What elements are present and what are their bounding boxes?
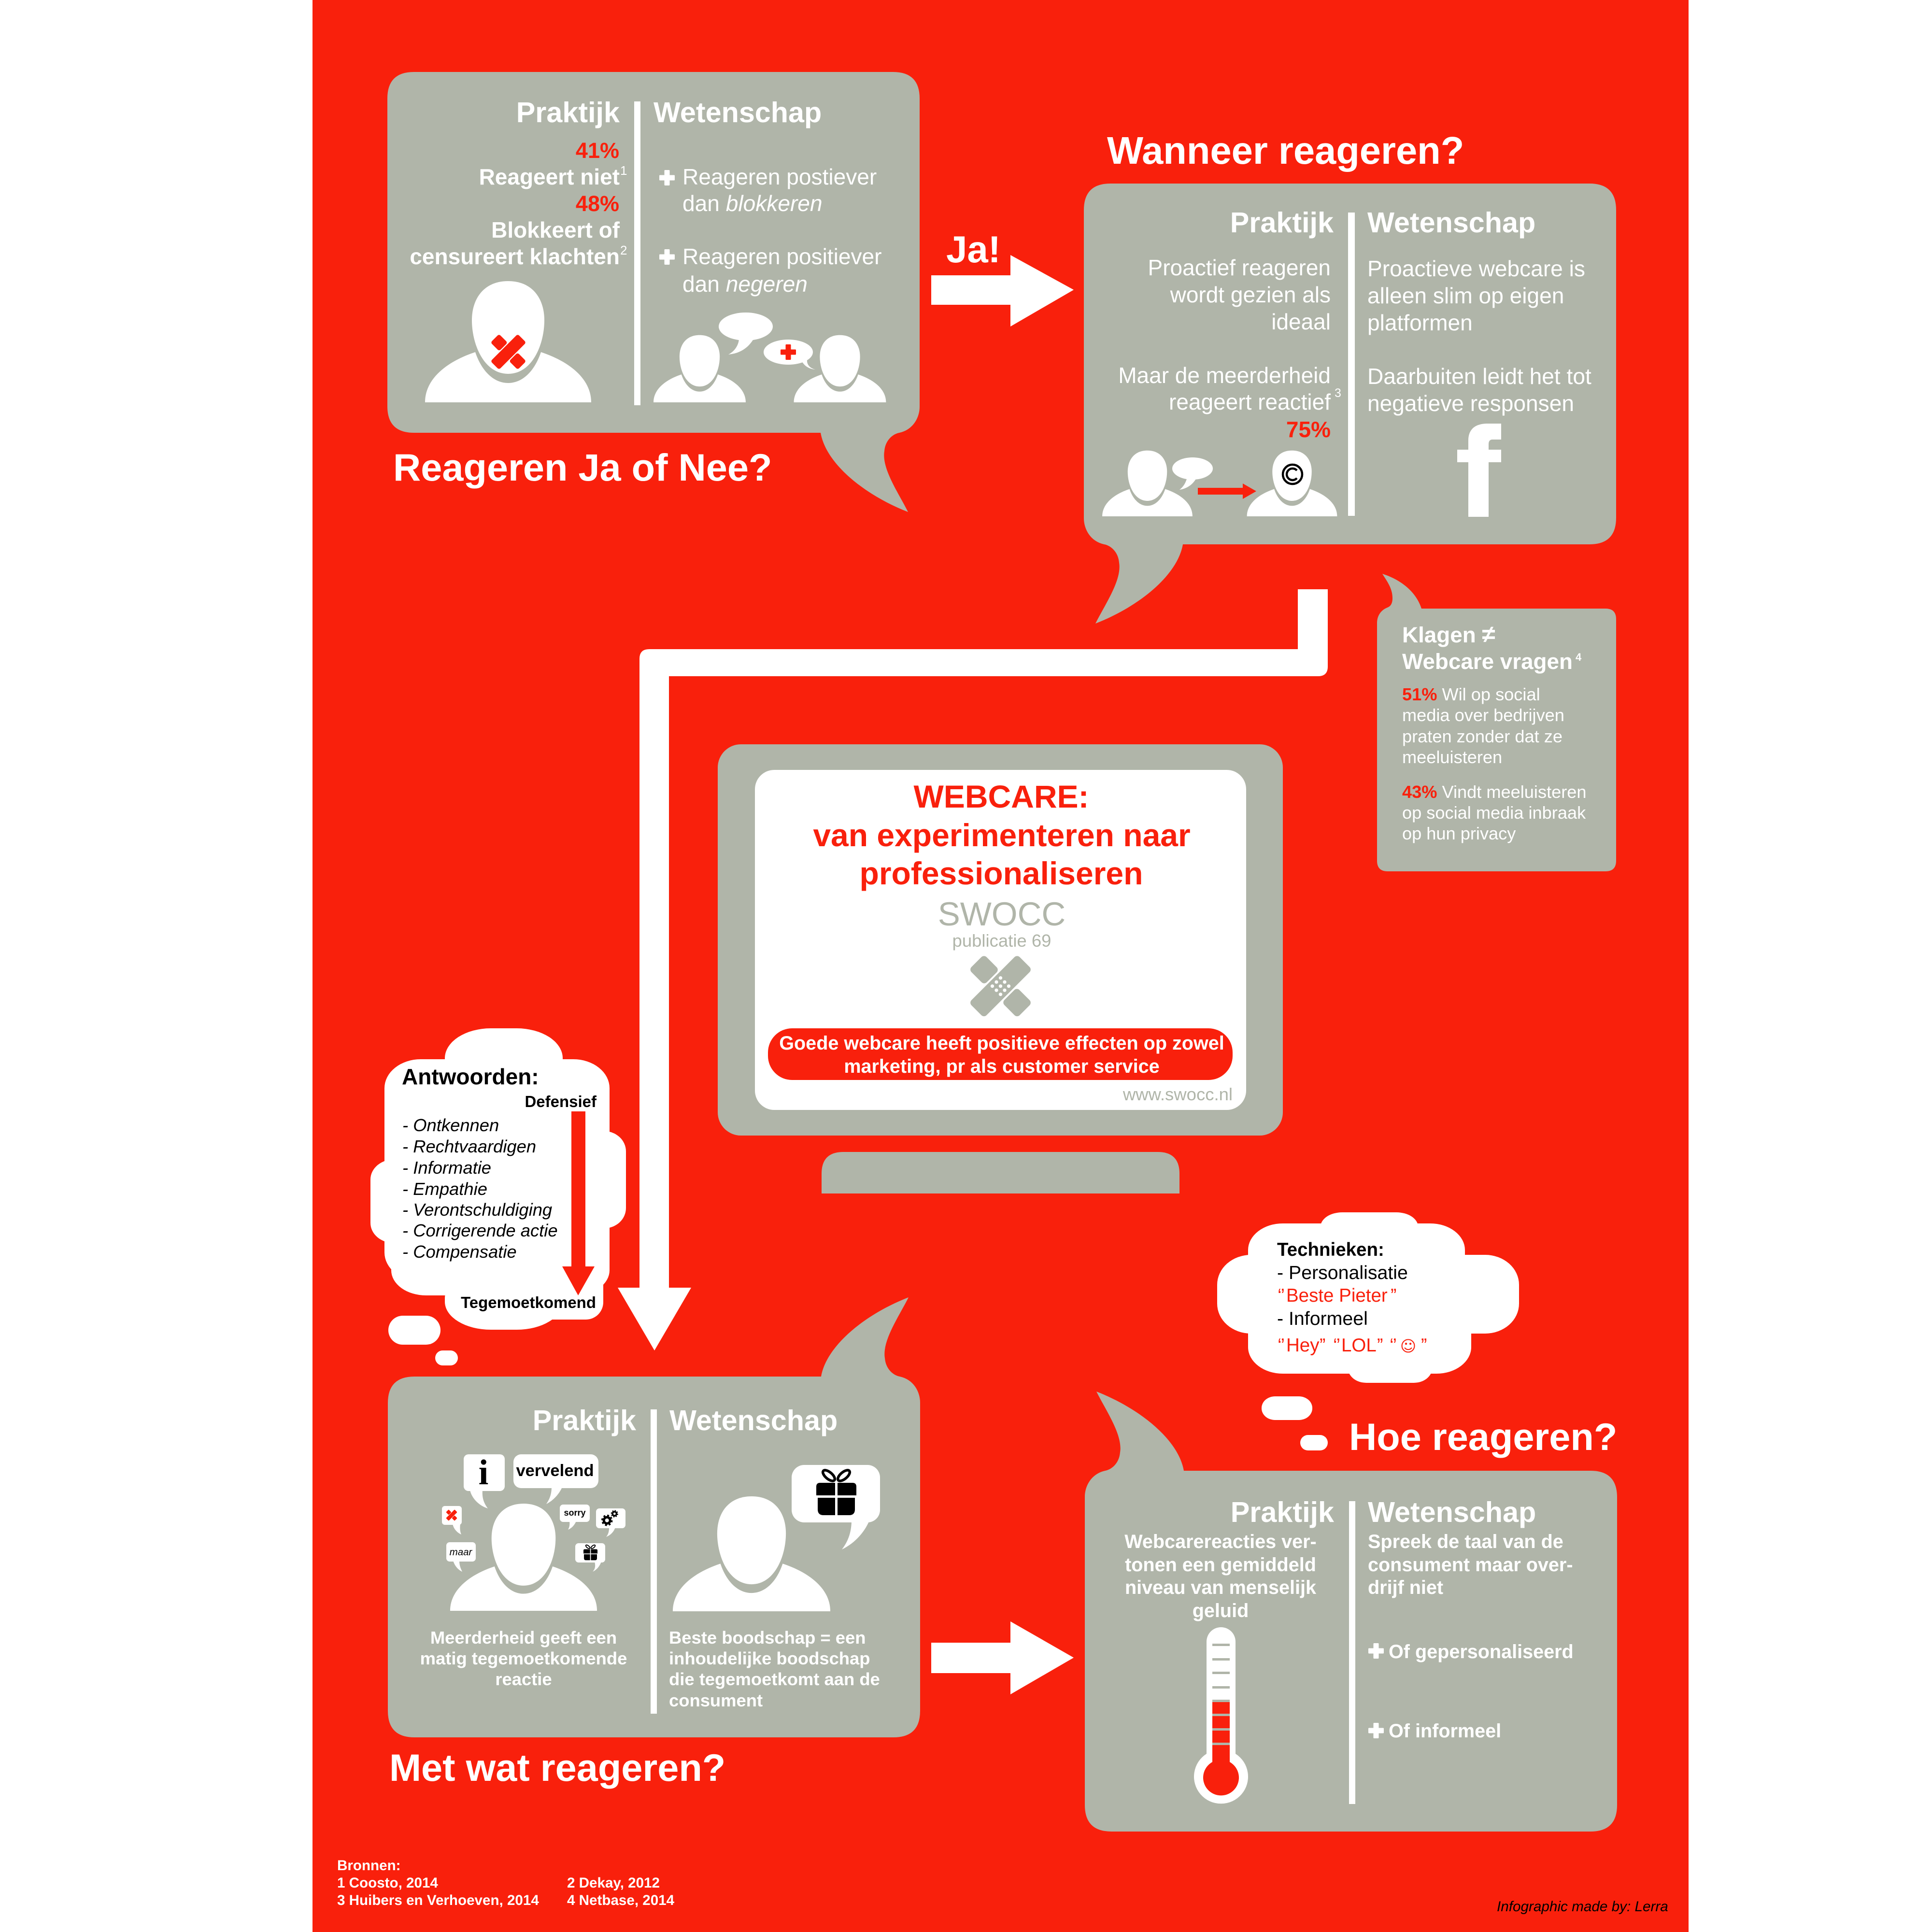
list of techniques: LOL	[1341, 1335, 1377, 1356]
list of techniques: Hey	[1286, 1335, 1320, 1356]
sources: 3 Huibers en Verhoeven, 2014	[337, 1892, 539, 1908]
science text: Spreek de taal van de	[1368, 1531, 1563, 1552]
callout: positive effects: marketing, pr als customer service	[844, 1056, 1160, 1077]
heading: praktijk: Praktijk	[1231, 1496, 1335, 1528]
bubble: red cross	[442, 1506, 462, 1534]
practice text: Webcarereacties ver-	[1124, 1531, 1317, 1552]
practice text: Proactief reageren	[1148, 255, 1331, 280]
list of responses: - Ontkennen	[402, 1115, 499, 1135]
bubble: maar	[446, 1542, 476, 1572]
list of techniques: - Personalisatie	[1277, 1262, 1408, 1283]
publisher: swocc: SWOCC	[938, 895, 1065, 933]
practice text: wordt gezien als	[1170, 282, 1331, 307]
panel: monitor with webcare title	[718, 744, 1283, 1193]
panel shape with speech tail	[388, 1297, 920, 1737]
bubble: vervelend: vervelend	[516, 1462, 594, 1480]
heading: Antwoorden:	[402, 1064, 539, 1089]
science statements: Reageren postiever	[682, 164, 877, 189]
science text: consument maar over-	[1368, 1554, 1573, 1576]
heading: 4	[1576, 651, 1582, 663]
list of techniques: ’’	[1377, 1335, 1383, 1356]
practice text	[420, 1628, 627, 1689]
practice text: 75%	[1286, 417, 1331, 442]
statistics text: 43% Vindt meeluisteren	[1402, 782, 1587, 802]
list of techniques: ‘’	[1333, 1335, 1340, 1356]
panel shape with speech tail	[387, 72, 920, 512]
sources: 1 Coosto, 2014	[337, 1875, 438, 1891]
list of techniques: ’’	[1421, 1335, 1427, 1356]
panel: hoe reageren	[1085, 1392, 1617, 1832]
list of techniques: ‘’	[1390, 1335, 1396, 1356]
divider	[651, 1409, 657, 1714]
icon: thermometer	[1194, 1627, 1248, 1804]
icon: person with gift bubble	[673, 1465, 880, 1611]
divider	[634, 101, 640, 405]
panel: met wat reageren	[388, 1297, 920, 1737]
bubble: information	[464, 1453, 505, 1508]
bubble: gears	[596, 1508, 625, 1537]
science text	[1368, 1531, 1574, 1742]
bubble: maar: maar	[450, 1547, 473, 1558]
practice text: matig tegemoetkomende	[420, 1648, 627, 1668]
science text	[1367, 256, 1591, 416]
science text: Of informeel	[1389, 1720, 1501, 1742]
practice text: tonen een gemiddeld	[1125, 1554, 1316, 1576]
practice statistics: Blokkeert of	[491, 217, 620, 242]
statistics text	[1402, 684, 1587, 843]
list of responses: - Empathie	[402, 1179, 487, 1199]
icon: person with response bubbles	[442, 1453, 625, 1611]
statistics text: 51% Wil op social	[1402, 684, 1540, 704]
science text: platformen	[1367, 310, 1473, 335]
science statements: Reageren positiever	[682, 244, 882, 269]
practice text	[1124, 1531, 1317, 1621]
practice text	[1118, 255, 1341, 442]
heading: wetenschap: Wetenschap	[669, 1404, 838, 1436]
cloud shape	[370, 1028, 626, 1365]
statistics text: media over bedrijven	[1402, 705, 1564, 725]
arrow: met wat to hoe	[931, 1621, 1074, 1694]
heading: praktijk: Praktijk	[516, 96, 620, 128]
panel: reageren ja of nee	[387, 72, 920, 512]
monitor frame	[718, 744, 1283, 1136]
practice statistics: Reageert niet	[479, 164, 620, 189]
website: www.swocc.nl	[1122, 1084, 1233, 1104]
title: webcare: van experimenteren naar	[813, 817, 1191, 853]
list of techniques: ‘’	[1278, 1285, 1284, 1306]
icon: silenced person with plaster	[425, 281, 591, 402]
icon: facebook logo	[1457, 424, 1501, 517]
science text: drijf niet	[1368, 1577, 1443, 1598]
science text: negatieve responsen	[1367, 391, 1574, 416]
statistics text: op hun privacy	[1402, 824, 1516, 843]
arrow shape	[931, 255, 1074, 327]
practice text: geluid	[1193, 1600, 1249, 1621]
bubble: vervelend	[513, 1454, 598, 1504]
bubble: small gift	[575, 1543, 605, 1572]
heading: Klagen ≠	[1402, 621, 1495, 648]
panel shape with speech tail	[1085, 1392, 1617, 1832]
list of responses: - Corrigerende actie	[402, 1221, 558, 1240]
practice text: Meerderheid geeft een	[430, 1628, 617, 1648]
heading: wetenschap: Wetenschap	[1367, 206, 1535, 239]
title: reageren ja of nee: Reageren Ja of Nee?	[393, 446, 772, 489]
practice text: 3	[1335, 386, 1341, 400]
science text: inhoudelijke boodschap	[669, 1648, 870, 1668]
statistics text: op social media inbraak	[1402, 803, 1586, 823]
practice statistics: censureert klachten	[410, 244, 620, 269]
science statements: dan negeren	[682, 271, 808, 297]
panel: wanneer reageren	[1084, 184, 1616, 624]
statistics text: meeluisteren	[1402, 747, 1502, 767]
list of responses: - Rechtvaardigen	[402, 1136, 536, 1156]
publication number: publicatie 69	[952, 931, 1051, 951]
panel shape	[1377, 574, 1616, 871]
bubble: sorry: sorry	[564, 1508, 586, 1518]
practice statistics	[410, 138, 627, 269]
heading: Technieken:	[1277, 1239, 1384, 1260]
bubble: sorry	[560, 1505, 590, 1530]
heading: wetenschap: Wetenschap	[653, 96, 822, 128]
thought bubble: antwoorden	[370, 1028, 626, 1365]
sources: Bronnen:	[337, 1858, 401, 1874]
science text: die tegemoetkomt aan de	[669, 1669, 880, 1689]
practice statistics: 2	[620, 243, 627, 257]
title: hoe reageren: Hoe reageren?	[1349, 1415, 1617, 1458]
monitor stand	[822, 1152, 1179, 1193]
science text: Of gepersonaliseerd	[1389, 1641, 1574, 1662]
list of techniques: ’’	[1319, 1335, 1325, 1356]
list of responses: - Verontschuldiging	[402, 1200, 552, 1220]
heading	[1402, 621, 1582, 674]
heading: Webcare vragen	[1402, 649, 1573, 674]
panel: klagen is niet webcare vragen	[1377, 574, 1616, 871]
list of responses: - Informatie	[402, 1158, 491, 1178]
sources: 2 Dekay, 2012	[567, 1875, 660, 1891]
science text	[669, 1628, 880, 1710]
arrow: ja	[931, 228, 1074, 327]
list of techniques: - Informeel	[1277, 1308, 1368, 1329]
bubble: information: i	[479, 1453, 488, 1492]
practice text: reactie	[495, 1669, 552, 1689]
monitor screen	[755, 770, 1246, 1110]
science text: consument	[669, 1690, 763, 1710]
list of techniques: Beste Pieter	[1286, 1285, 1388, 1306]
arrow: defensive to accommodating	[562, 1111, 595, 1295]
science text: Daarbuiten leidt het tot	[1367, 364, 1591, 389]
title: webcare: professionaliseren	[860, 855, 1143, 891]
credit: Infographic made by: Lerra	[1497, 1899, 1668, 1915]
list of responses	[402, 1115, 558, 1262]
list of techniques	[1277, 1262, 1427, 1356]
practice text: ideaal	[1271, 309, 1331, 334]
list of techniques: ’’	[1390, 1285, 1396, 1306]
heading: wetenschap: Wetenschap	[1368, 1496, 1536, 1528]
sources	[337, 1858, 675, 1908]
practice text: reageert reactief	[1169, 389, 1331, 414]
callout: positive effects: Goede webcare heeft positieve effecten op zowel	[779, 1033, 1224, 1054]
title: webcare	[813, 779, 1191, 891]
title: wanneer reageren: Wanneer reageren?	[1107, 129, 1464, 172]
divider	[1348, 213, 1355, 516]
science statements: dan blokkeren	[682, 191, 823, 216]
thought bubble: technieken	[1217, 1212, 1519, 1450]
practice statistics: 1	[620, 163, 627, 178]
list of techniques: ☺	[1400, 1337, 1416, 1355]
divider	[1349, 1501, 1355, 1804]
panel shape with speech tail	[1084, 184, 1616, 624]
practice text: Maar de meerderheid	[1118, 363, 1331, 388]
science statements	[659, 164, 882, 297]
practice statistics: 41%	[576, 138, 619, 163]
practice text: niveau van menselijk	[1125, 1577, 1317, 1598]
heading: praktijk: Praktijk	[1230, 206, 1334, 239]
list of techniques: ‘’	[1278, 1335, 1284, 1356]
science text: Proactieve webcare is	[1367, 256, 1585, 281]
practice statistics: 48%	[576, 191, 619, 216]
cloud shape	[1217, 1212, 1519, 1450]
scale label: tegemoetkomend: Tegemoetkomend	[461, 1293, 596, 1311]
sources: 4 Netbase, 2014	[567, 1892, 675, 1908]
icon: person speaking to company	[1102, 451, 1337, 516]
science text: Beste boodschap = een	[669, 1628, 866, 1648]
arrow: connector from wanneer to met wat	[618, 589, 1328, 1350]
label: ja: Ja!	[946, 228, 1001, 270]
list of responses: - Compensatie	[402, 1242, 517, 1262]
statistics text: praten zonder dat ze	[1402, 726, 1563, 746]
science text: alleen slim op eigen	[1367, 283, 1564, 308]
callout: positive effects	[768, 1028, 1233, 1080]
icon: grey plaster	[969, 954, 1032, 1018]
title: met wat reageren: Met wat reageren?	[389, 1746, 725, 1789]
heading: praktijk: Praktijk	[533, 1404, 637, 1436]
scale label: defensief: Defensief	[525, 1093, 597, 1110]
icon: two people talking	[653, 313, 886, 402]
title: webcare: WEBCARE:	[914, 779, 1089, 814]
